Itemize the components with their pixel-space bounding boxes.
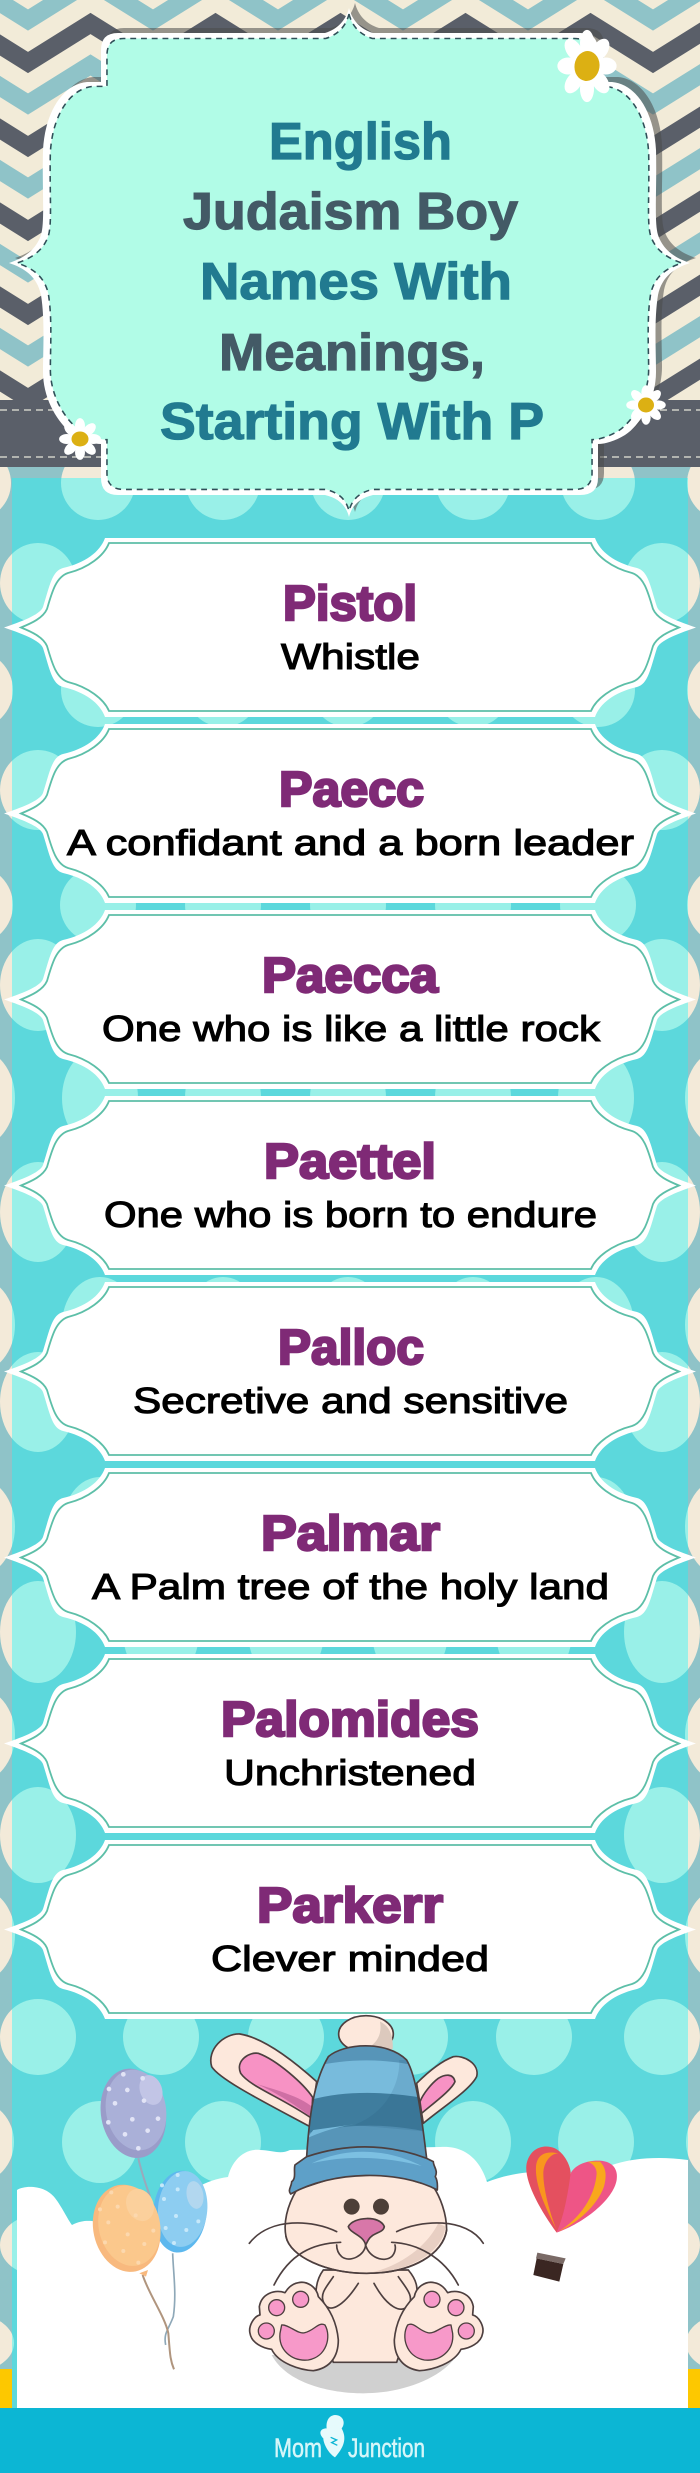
icon: heart hot-air balloon <box>526 2146 617 2282</box>
title plaque <box>9 3 696 517</box>
title text: English <box>269 113 452 171</box>
icon: mother and child <box>320 2415 344 2457</box>
card: Paecca: One who is like a little rock <box>102 1008 601 1049</box>
icon: bunny illustration <box>211 2016 483 2393</box>
title text: Starting With P <box>160 393 544 451</box>
title text: Names With <box>200 253 512 311</box>
card: Palmar: A Palm tree of the holy land <box>92 1566 609 1607</box>
orange balloon <box>85 2178 168 2278</box>
title text: Judaism Boy <box>183 183 518 241</box>
card: Paettel: One who is born to endure <box>104 1194 597 1235</box>
card: Parkerr: Clever minded <box>211 1938 489 1979</box>
card: Paecc: A confidant and a born leader <box>67 822 634 863</box>
polka strip background <box>0 446 700 2408</box>
card: Paettel: Paettel <box>264 1135 436 1189</box>
bunny shadow and body <box>272 2270 453 2393</box>
icon: daisy top right <box>557 30 617 102</box>
card: Palloc <box>4 1282 696 1461</box>
card: Pistol: Whistle <box>281 636 420 677</box>
icon: daisy bottom left <box>59 418 101 460</box>
icon: balloons <box>85 2063 211 2369</box>
card: Paettel <box>4 1096 696 1275</box>
MomJunction logo: Mom <box>274 2433 322 2463</box>
bunny head, ears and hat <box>211 2016 483 2285</box>
yellow corner left <box>0 2369 12 2408</box>
icon: daisy right <box>626 385 666 425</box>
title text <box>160 113 544 451</box>
yellow corner right <box>688 2369 700 2408</box>
white cloud <box>17 2147 688 2408</box>
card: Paecca: Paecca <box>262 949 439 1003</box>
card: Pistol <box>4 538 696 717</box>
bunny feet <box>250 2282 483 2371</box>
card: Pistol: Pistol <box>283 577 417 631</box>
card: Palomides: Palomides <box>221 1693 479 1747</box>
title text: Meanings, <box>219 324 485 382</box>
card: Palmar <box>4 1468 696 1647</box>
card: Paecc <box>4 724 696 903</box>
card: Palomides <box>4 1654 696 1833</box>
card: Palomides: Unchristened <box>224 1752 476 1793</box>
card: Paecc: Paecc <box>279 763 424 817</box>
grey stitched band <box>0 400 700 467</box>
MomJunction logo: Junction <box>348 2433 425 2463</box>
card: Palmar: Palmar <box>261 1507 440 1561</box>
card: Palloc: Secretive and sensitive <box>133 1380 568 1421</box>
card: Parkerr: Parkerr <box>257 1879 443 1933</box>
MomJunction logo <box>274 2415 425 2463</box>
blue balloon <box>150 2168 211 2255</box>
card: Parkerr <box>4 1840 696 2019</box>
card: Paecca <box>4 910 696 1089</box>
chevron background <box>0 0 700 410</box>
card: Palloc: Palloc <box>278 1321 424 1375</box>
purple balloon <box>94 2063 173 2163</box>
footer bar <box>0 2408 700 2473</box>
